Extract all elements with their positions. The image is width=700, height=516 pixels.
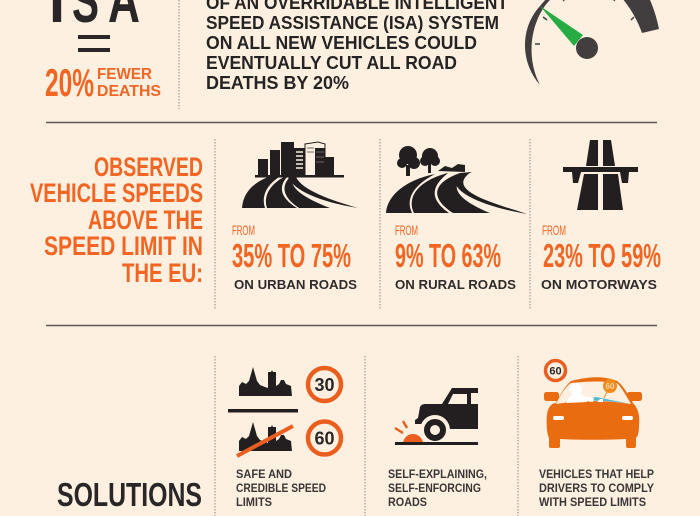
intro text block bbox=[206, 0, 508, 93]
icon: speedometer bbox=[525, 0, 659, 85]
panel: safe and credible speed limits: SAFE AND bbox=[236, 467, 292, 481]
panel: motorways: FROM bbox=[542, 222, 566, 238]
icon: city and road bbox=[242, 142, 358, 208]
heading: observed vehicle speeds: ABOVE THE bbox=[88, 205, 203, 235]
panel: self-explaining roads: SELF-EXPLAINING, bbox=[388, 467, 487, 481]
intro text block: ON ALL NEW VEHICLES COULD bbox=[206, 33, 477, 53]
headline: ISA equals 20% fewer deaths bbox=[45, 0, 161, 105]
headline: ISA equals 20% fewer deaths: FEWER bbox=[97, 66, 152, 83]
icon: 60 sign bbox=[546, 360, 566, 380]
intro text block: DEATHS BY 20% bbox=[206, 73, 349, 93]
panel: self-explaining roads: SELF-ENFORCING bbox=[388, 481, 481, 495]
icon: trees and road bbox=[386, 146, 527, 214]
panel: rural roads: 9% TO 63% bbox=[395, 237, 501, 274]
panel: motorways: ON MOTORWAYS bbox=[541, 277, 657, 292]
panel: safe and credible speed limits: CREDIBLE SPEED bbox=[236, 481, 326, 495]
icon: truck on speed bump bbox=[395, 388, 478, 445]
headline: ISA equals 20% fewer deaths: 20% bbox=[45, 62, 94, 105]
intro text block: EVENTUALLY CUT ALL ROAD bbox=[206, 53, 457, 73]
icon: 60 sign: 60 bbox=[314, 428, 335, 448]
heading: observed vehicle speeds: SPEED LIMIT IN bbox=[44, 231, 203, 261]
icon: skyline upper bbox=[239, 367, 292, 396]
icon: motorway bridge bbox=[563, 140, 638, 210]
panel: urban roads: ON URBAN ROADS bbox=[234, 277, 357, 292]
heading: observed vehicle speeds: THE EU: bbox=[122, 258, 203, 288]
panel: urban roads: 35% TO 75% bbox=[232, 237, 351, 274]
heading: observed vehicle speeds bbox=[30, 152, 203, 288]
panel: vehicles that help drivers comply: DRIVERS TO COMPLY bbox=[539, 481, 654, 495]
panel: motorways bbox=[541, 140, 661, 292]
panel: safe and credible speed limits: LIMITS bbox=[236, 495, 272, 509]
heading: observed vehicle speeds: OBSERVED bbox=[94, 152, 203, 182]
panel: vehicles that help drivers comply: VEHICLES THAT HELP bbox=[539, 467, 654, 481]
panel: vehicles that help drivers comply: WITH SPEED LIMITS bbox=[539, 495, 646, 509]
panel: self-explaining roads: ROADS bbox=[388, 495, 427, 509]
panel: safe and credible speed limits bbox=[228, 367, 341, 509]
icon: 30 sign: 30 bbox=[314, 375, 335, 395]
panel: rural roads bbox=[386, 146, 527, 292]
intro text block: SPEED ASSISTANCE (ISA) SYSTEM bbox=[206, 13, 499, 33]
panel: vehicles that help drivers comply bbox=[539, 360, 654, 509]
icon: 60 sign: 60 bbox=[549, 366, 562, 378]
icon: orange car bbox=[544, 377, 642, 448]
icon: 30 sign bbox=[308, 368, 341, 401]
icon: skyline lower, crossed out bbox=[237, 422, 293, 456]
panel: self-explaining roads bbox=[388, 388, 487, 509]
heading: observed vehicle speeds: VEHICLE SPEEDS bbox=[30, 178, 203, 208]
panel: rural roads: FROM bbox=[395, 222, 418, 238]
panel: urban roads: FROM bbox=[232, 222, 255, 238]
headline: ISA equals 20% fewer deaths: DEATHS bbox=[97, 83, 161, 100]
heading: solutions: SOLUTIONS bbox=[57, 476, 202, 513]
icon: 60 sign bbox=[308, 422, 341, 454]
panel: urban roads bbox=[232, 142, 358, 292]
panel: rural roads: ON RURAL ROADS bbox=[395, 277, 516, 292]
icon: orange car: 60 bbox=[606, 382, 615, 391]
